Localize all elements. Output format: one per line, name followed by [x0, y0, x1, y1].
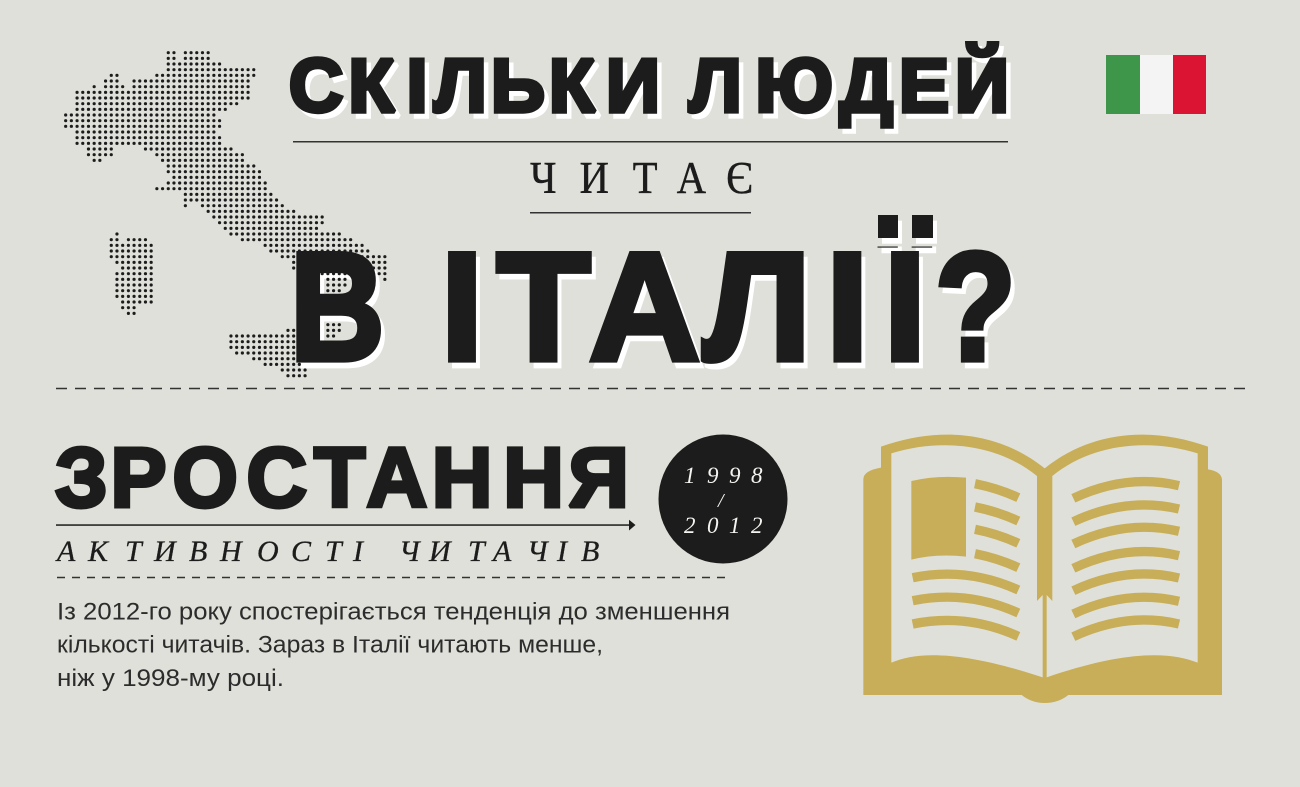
title: in Italy: ІТАЛІЇ: [441, 221, 930, 393]
subtitle: reads: ЧИТАЄ: [530, 154, 753, 204]
title: how many people: СКІЛЬКИ ЛЮДЕЙ: [294, 49, 1013, 133]
title shadow: in Italy: ІТАЛІЇ: [445, 226, 934, 398]
flag of Italy: [1106, 55, 1206, 114]
title shadow: in Italy: ?: [939, 227, 1020, 399]
body text: кількості читачів. Зараз в Італії читають менше,: [57, 632, 603, 659]
badge: 1998 / 2012: 1998: [684, 463, 763, 488]
badge: 1998 / 2012: 2012: [684, 513, 762, 538]
subheading: reader activity: АКТИВНОСТІ ЧИТАЧІВ: [55, 535, 599, 568]
body text: Із 2012-го року спостерігається тенденція до зменшення: [57, 598, 730, 625]
body text: ніж у 1998-му році.: [57, 665, 284, 692]
title: how many people: СКІЛЬКИ ЛЮДЕЙ: [289, 43, 1009, 127]
icon: open book: [863, 435, 1222, 703]
arrow: [56, 520, 636, 530]
dotted map of Italy: [66, 53, 385, 376]
title shadow: in Italy: [294, 226, 1020, 399]
title: in Italy: В: [290, 222, 385, 393]
heading: growth: ЗРОСТАННЯ: [55, 430, 629, 524]
badge: 1998 / 2012: /: [717, 490, 726, 512]
title: in Italy: ?: [935, 221, 1016, 393]
body text: [57, 598, 730, 692]
title: in Italy: [290, 205, 1016, 393]
badge: 1998 / 2012: [658, 434, 788, 564]
title shadow: in Italy: В: [294, 228, 389, 399]
